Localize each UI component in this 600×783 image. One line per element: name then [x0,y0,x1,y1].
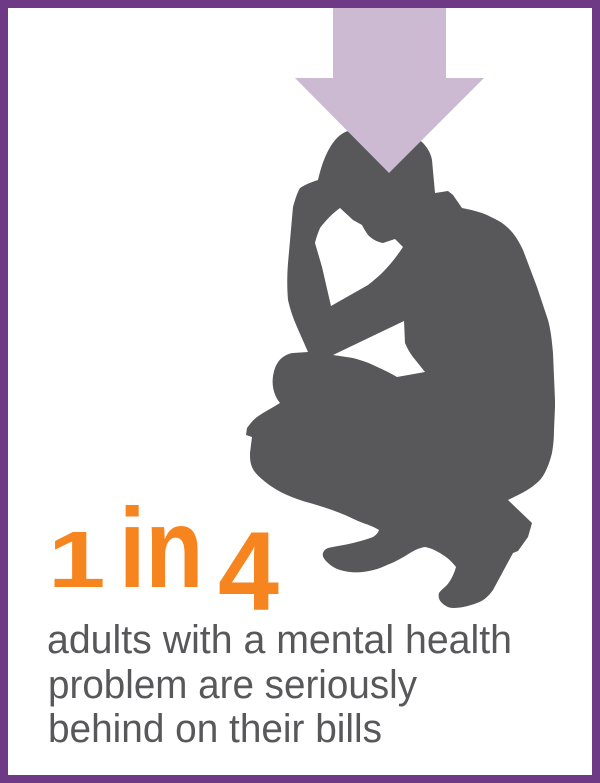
description text [47,618,512,751]
headline: 1 in 4: in [119,485,204,611]
headline: 1 in 4: 4 [218,509,279,634]
headline: 1 in 4 [48,485,279,634]
description text: adults with a mental health [47,618,512,662]
icon: crouching person silhouette [246,130,555,608]
description text: behind on their bills [48,707,382,751]
headline: 1 in 4: 1 [48,515,106,604]
description text: problem are seriously [48,663,417,707]
icon: down arrow [295,8,484,173]
